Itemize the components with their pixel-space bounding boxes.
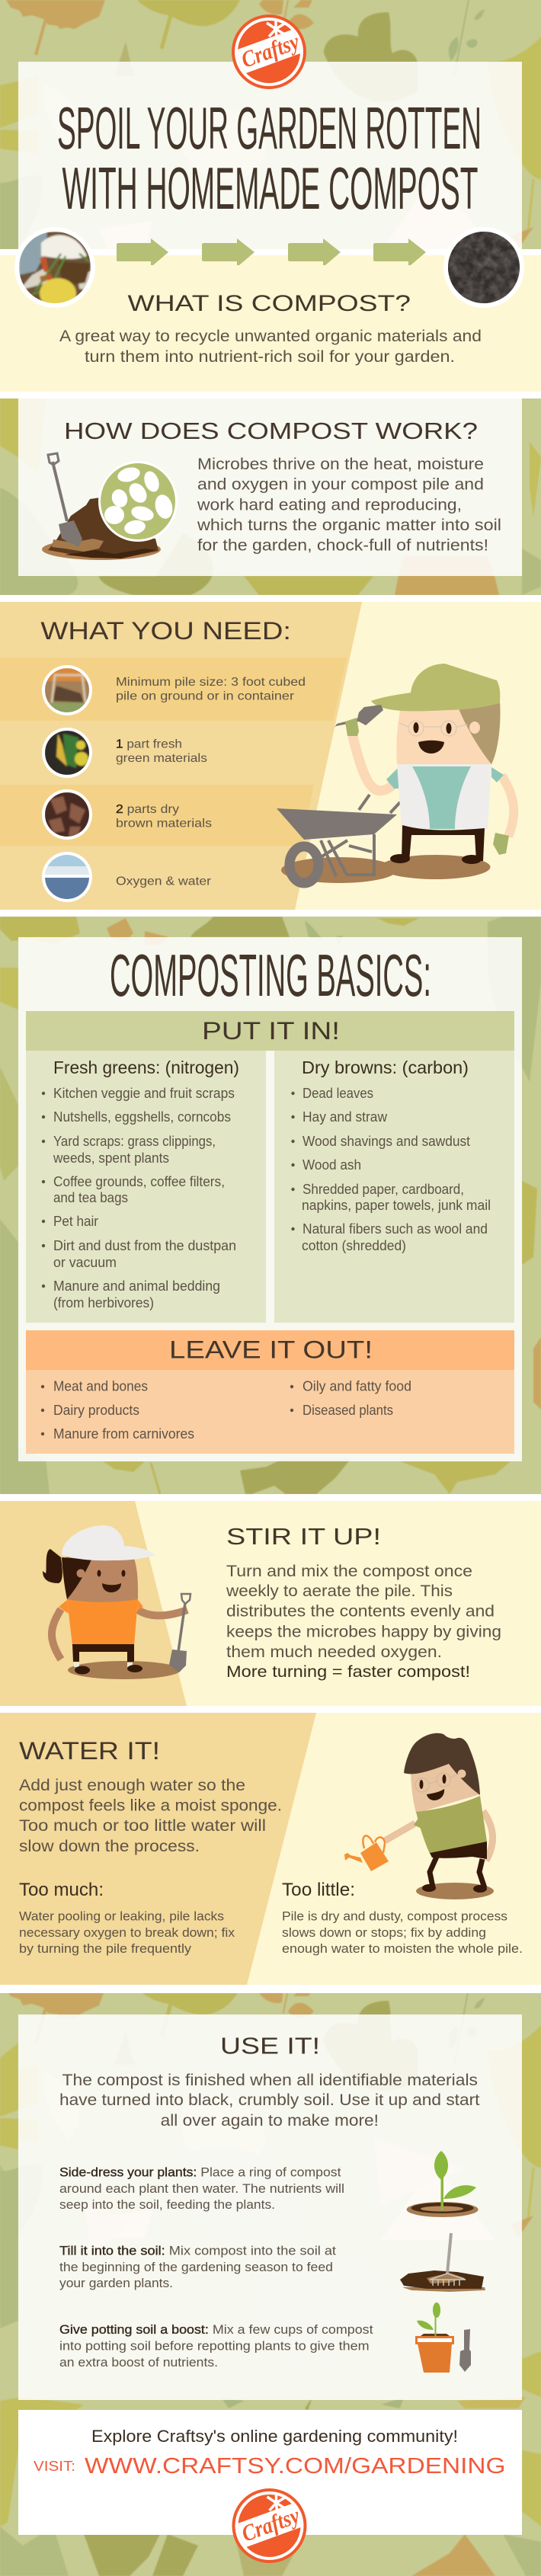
panel: title card (18, 62, 522, 249)
list: dry browns: napkins, paper towels, junk mail (302, 1198, 491, 1213)
text: visit link: WWW.CRAFTSY.COM/GARDENING (85, 2454, 506, 2478)
list: fresh greens: Manure and animal bedding (53, 1278, 220, 1294)
subheading: too little (282, 1880, 523, 1956)
heading: what is compost: WHAT IS COMPOST? (128, 291, 411, 316)
text: too little description: enough water to moisten the whole pile. (282, 1941, 523, 1956)
subheading: too much: Too much: (19, 1880, 104, 1900)
text: give potting soil a boost: Give potting soil a boost: Mix a few cups of compost (59, 2322, 373, 2337)
list: dry browns: Dry browns: (carbon) (302, 1058, 469, 1077)
icon: potted plant and trowel (415, 2302, 471, 2373)
heading: put it in: PUT IT IN! (202, 1017, 340, 1045)
text: too much description: Water pooling or leaking, pile lacks (19, 1909, 224, 1924)
text: too little description: slows down or stops; fix by adding (282, 1925, 486, 1940)
text: explore community: Explore Craftsy's online gardening community! (91, 2427, 458, 2446)
section: what is compost background (0, 255, 541, 392)
list: fresh greens: Coffee grounds, coffee filters, (53, 1174, 225, 1189)
list: fresh greens: Nutshells, eggshells, corncobs (53, 1109, 231, 1125)
list: fresh greens: (from herbivores) (53, 1295, 154, 1310)
text: too much description (19, 1909, 235, 1956)
text: visit link: VISIT: (34, 2459, 75, 2474)
list: dry browns: cotton (shredded) (302, 1238, 406, 1253)
text: too much description: by turning the pile frequently (19, 1941, 192, 1956)
list: fresh greens: Kitchen veggie and fruit scraps (53, 1086, 235, 1101)
section: use it background (0, 1993, 541, 2576)
list: fresh greens: Fresh greens: (nitrogen) (53, 1058, 239, 1077)
list: fresh greens: and tea bags (53, 1190, 128, 1205)
heading: what you need: WHAT YOU NEED: (40, 617, 291, 645)
text: side-dress your plants: seep into the soil, feeding the plants. (59, 2197, 275, 2212)
list: fresh greens: Pet hair (53, 1214, 98, 1229)
section: stir it up background (0, 1501, 541, 1706)
list: fresh greens: Yard scraps: grass clippings, (53, 1134, 216, 1149)
text: how compost works: and oxygen in your compost pile and (197, 476, 484, 494)
list: leave it out items: Diseased plants (303, 1403, 393, 1418)
text: side-dress your plants (59, 2165, 344, 2212)
text: till it into the soil: your garden plants. (59, 2276, 173, 2290)
illustration: woman with shovel (43, 1525, 190, 1679)
text: what you need list: 1 part fresh (116, 738, 182, 751)
panel: visit footer (18, 2410, 522, 2535)
list: leave it out items: Dairy products (53, 1403, 139, 1418)
text: stir it up description (226, 1563, 501, 1681)
list: dry browns: Natural fibers such as wool and (303, 1221, 488, 1237)
illustration: gardener with wheelbarrow (277, 664, 514, 883)
list: dry browns: Hay and straw (303, 1109, 388, 1125)
section: what you need background (0, 602, 541, 910)
text: what is compost description: turn them into nutrient-rich soil for your garden. (85, 348, 455, 366)
text: too little description: Pile is dry and dusty, compost process (282, 1909, 507, 1924)
text: till it into the soil (59, 2244, 336, 2290)
icon: rake in soil (400, 2233, 485, 2292)
text: stir it up description: distributes the contents evenly and (226, 1603, 495, 1621)
list: fresh greens: or vacuum (53, 1255, 117, 1270)
photo: brown leaves (42, 789, 92, 840)
list: dry browns: Wood shavings and sawdust (303, 1134, 470, 1149)
section: composting basics background (0, 917, 541, 1494)
text: give potting soil a boost: into potting soil before repotting plants to give them (59, 2339, 370, 2354)
list: leave it out items: Manure from carnivores (53, 1426, 194, 1442)
text: side-dress your plants: around each plant then water. The nutrients will (59, 2181, 344, 2196)
text: too much description: necessary oxygen to break down; fix (19, 1925, 235, 1940)
list: dry browns: Dead leaves (303, 1086, 373, 1101)
title (57, 94, 482, 222)
list: dry browns (291, 1058, 491, 1253)
text: stir it up description: keeps the microbes happy by giving (226, 1624, 501, 1641)
illustration: compost pile with microbes (42, 453, 178, 560)
text: water it description: slow down the process. (19, 1838, 200, 1855)
text: what you need list (116, 676, 306, 888)
photo: food scraps (14, 227, 95, 309)
heading: stir it up: STIR IT UP! (226, 1523, 381, 1550)
heading: water it: WATER IT! (19, 1737, 160, 1765)
text: stir it up description: them much needed oxygen. (226, 1643, 442, 1661)
logo: Craftsy top: Craftsy (238, 29, 303, 73)
text: what you need list: pile on ground or in container (116, 690, 295, 702)
text: stir it up description: weekly to aerate the pile. This (226, 1582, 453, 1600)
logo: Craftsy bottom (232, 2488, 306, 2563)
text: stir it up description: More turning = faster compost! (226, 1663, 470, 1681)
text: what you need list: Minimum pile size: 3 foot cubed (116, 676, 306, 689)
text: use it description (59, 2072, 480, 2130)
logo: Craftsy top (232, 14, 306, 89)
text: how compost works: Microbes thrive on the heat, moisture (197, 456, 484, 473)
list: fresh greens (42, 1058, 239, 1310)
subheading: too much (19, 1880, 235, 1956)
text: what you need list: green materials (116, 752, 207, 765)
text: till it into the soil: Till it into the soil: Mix compost into the soil at (59, 2244, 336, 2258)
text: give potting soil a boost (59, 2322, 373, 2370)
arrows: process arrows (117, 238, 426, 265)
illustration: man with watering can (344, 1733, 494, 1899)
text: too little description (282, 1909, 523, 1956)
section: how does compost work background (0, 398, 541, 595)
text: how compost works: which turns the organic matter into soil (197, 517, 501, 534)
text: how compost works: work hard eating and reproducing, (197, 496, 462, 514)
list: fresh greens: Dirt and dust from the dustpan (53, 1238, 236, 1253)
text: what you need list: Oxygen & water (116, 875, 212, 888)
panel: put it in (26, 1011, 514, 1323)
text: what you need list: brown materials (116, 818, 212, 830)
list: leave it out items (41, 1379, 411, 1442)
list: fresh greens: weeds, spent plants (53, 1150, 169, 1166)
text: use it description: The compost is finished when all identifiable materials (62, 2072, 478, 2089)
list: leave it out items: Meat and bones (53, 1379, 148, 1394)
icon: plant with compost ring (407, 2151, 479, 2217)
section: water it background (0, 1713, 541, 1985)
text: what you need list: 2 parts dry (116, 803, 179, 816)
text: side-dress your plants: Side-dress your plants: Place a ring of compost (59, 2165, 341, 2179)
text: water it description: Too much or too little water will (19, 1817, 266, 1835)
text: what is compost description (59, 328, 482, 366)
logo: Craftsy bottom: Craftsy (238, 2503, 303, 2547)
photo: sky and water (42, 852, 92, 902)
text: water it description: Add just enough water so the (19, 1777, 245, 1794)
text: till it into the soil: the beginning of the gardening season to feed (59, 2260, 333, 2274)
text: use it description: all over again to make more! (161, 2112, 379, 2130)
heading: use it: USE IT! (220, 2033, 320, 2059)
text: water it description: compost feels like a moist sponge. (19, 1797, 282, 1815)
panel: leave it out (26, 1330, 514, 1454)
photo: green materials (42, 728, 92, 778)
list: leave it out items: Oily and fatty food (303, 1379, 411, 1394)
text: stir it up description: Turn and mix the compost once (226, 1563, 472, 1580)
subheading: too little: Too little: (282, 1880, 355, 1900)
heading: leave it out: LEAVE IT OUT! (169, 1336, 373, 1364)
text: water it description (19, 1777, 282, 1855)
list: dry browns: Shredded paper, cardboard, (303, 1182, 464, 1197)
section: header background (0, 0, 541, 249)
text: give potting soil a boost: an extra boost of nutrients. (59, 2355, 218, 2370)
text: how compost works: for the garden, chock-full of nutrients! (197, 537, 488, 555)
text: what is compost description: A great way to recycle unwanted organic materials and (59, 328, 482, 345)
heading: how does compost work: HOW DOES COMPOST WORK? (64, 418, 478, 444)
photo: compost bin (42, 665, 92, 715)
text: use it description: have turned into black, crumbly soil. Use it up and start (59, 2091, 480, 2109)
text: how compost works (197, 456, 501, 555)
photo: finished soil (443, 227, 524, 308)
list: dry browns: Wood ash (303, 1157, 361, 1173)
